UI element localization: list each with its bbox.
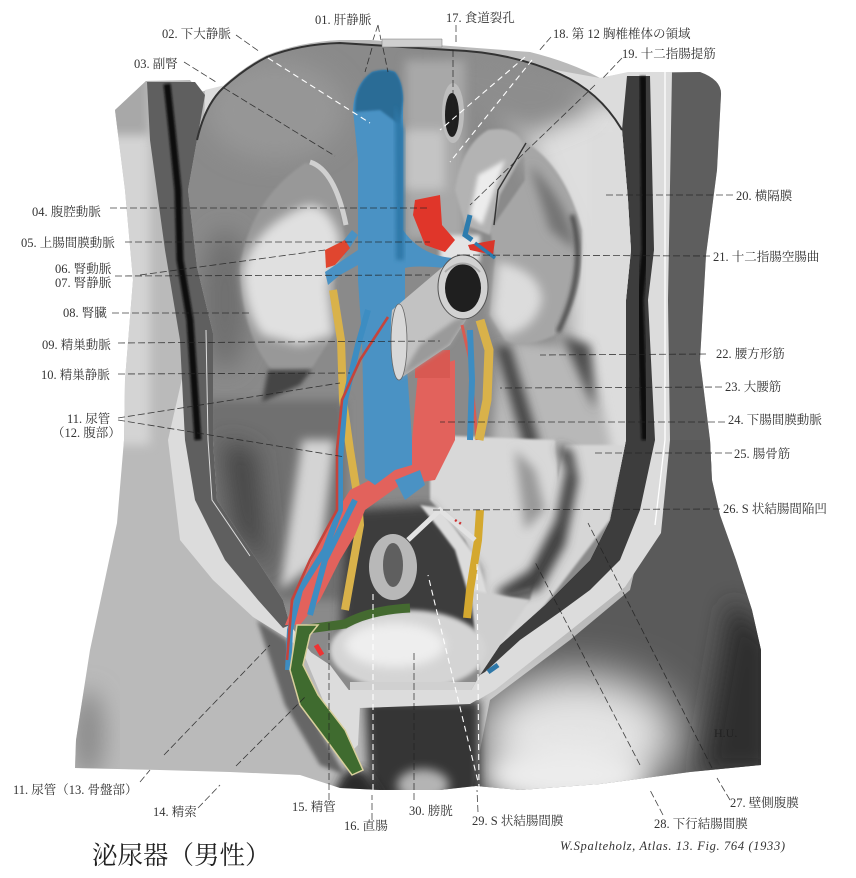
iliac fossa left <box>205 400 345 600</box>
label 14: 14. 精索 <box>153 804 197 819</box>
diaphragm edge <box>197 43 622 140</box>
center upper <box>405 60 465 240</box>
right gonadal vessels and ureter <box>462 320 489 618</box>
label 09: 09. 精巣動脈 <box>42 337 111 352</box>
label 24: 24. 下腸間膜動脈 <box>728 412 822 427</box>
label 04: 04. 腹腔動脈 <box>32 204 101 219</box>
right kidney with suprarenal <box>455 129 582 344</box>
leader lines <box>110 25 733 820</box>
abdominal wall section right <box>168 42 672 706</box>
label 22: 22. 腰方形筋 <box>716 346 785 361</box>
left ureter yellow <box>333 290 360 610</box>
duodenum tube <box>391 265 485 380</box>
label 06: 06. 腎動脈 <box>55 261 112 276</box>
renal artery left <box>325 240 350 268</box>
label 12: （12. 腹部） <box>52 425 121 440</box>
blue branch pelvis <box>310 500 355 615</box>
label 05: 05. 上腸間膜動脈 <box>21 235 115 250</box>
label 19: 19. 十二指腸提筋 <box>622 46 716 61</box>
mesocolon light <box>430 435 560 600</box>
label 07: 07. 腎静脈 <box>55 275 112 290</box>
right upper pale field <box>504 88 631 472</box>
label 08: 08. 腎臓 <box>63 305 107 320</box>
label 11 pelvic part: 11. 尿管（13. 骨盤部） <box>13 782 138 797</box>
small vessels at inguinal ring right <box>488 665 498 672</box>
sigmoid colon section <box>369 510 475 600</box>
inferior vena cava <box>325 70 452 500</box>
psoas right <box>490 340 612 470</box>
label 17: 17. 食道裂孔 <box>446 10 515 25</box>
gonadal vein left <box>288 310 368 670</box>
label 28: 28. 下行結腸間膜 <box>654 816 748 831</box>
label 20: 20. 横隔膜 <box>736 188 792 203</box>
label 10: 10. 精巣静脈 <box>41 367 110 382</box>
label 18: 18. 第 12 胸椎椎体の領域 <box>553 26 691 41</box>
esophageal hiatus <box>442 83 464 143</box>
label 23: 23. 大腰筋 <box>725 379 782 394</box>
left kidney <box>240 162 346 402</box>
label 25: 25. 腸骨筋 <box>734 447 791 461</box>
torso silhouette <box>60 30 790 805</box>
right renal vessels <box>465 215 495 258</box>
label 26: 26. S 状結腸間陥凹 <box>723 501 827 516</box>
label 21: 21. 十二指腸空腸曲 <box>713 249 819 264</box>
label 11: 11. 尿管 <box>67 412 110 426</box>
peritoneal cavity <box>180 40 650 710</box>
gonadal artery left <box>287 317 388 660</box>
label 29: 29. S 状結腸間膜 <box>472 813 563 828</box>
esophagus opening <box>445 93 459 137</box>
label 30: 30. 膀胱 <box>409 803 453 818</box>
bladder <box>330 610 486 690</box>
title: 泌尿器（男性） <box>92 841 271 870</box>
top central notch <box>382 39 442 47</box>
iliac artery common red <box>285 350 455 625</box>
duodenojejunal ring <box>438 255 488 319</box>
pelvis dark <box>340 505 480 650</box>
celiac artery red <box>413 195 455 252</box>
label 16: 16. 直腸 <box>344 819 388 833</box>
small mesenteric vessels <box>455 520 463 525</box>
credit: W.Spalteholz, Atlas. 13. Fig. 764 (1933) <box>560 839 785 853</box>
label 15: 15. 精管 <box>292 799 336 814</box>
label 27: 27. 壁側腹膜 <box>730 795 799 810</box>
label 03: 03. 副腎 <box>134 57 178 71</box>
spermatic fascia flap <box>300 645 360 755</box>
label 02: 02. 下大静脈 <box>162 26 231 41</box>
illustration: male urinary system anatomy <box>60 30 790 805</box>
label 01: 01. 肝静脈 <box>315 12 372 27</box>
signature H.U.: H.U. <box>714 726 737 740</box>
abdominal wall section left <box>147 82 290 628</box>
lower rim strip <box>345 688 497 708</box>
vas deferens and spermatic cord green <box>290 608 410 775</box>
